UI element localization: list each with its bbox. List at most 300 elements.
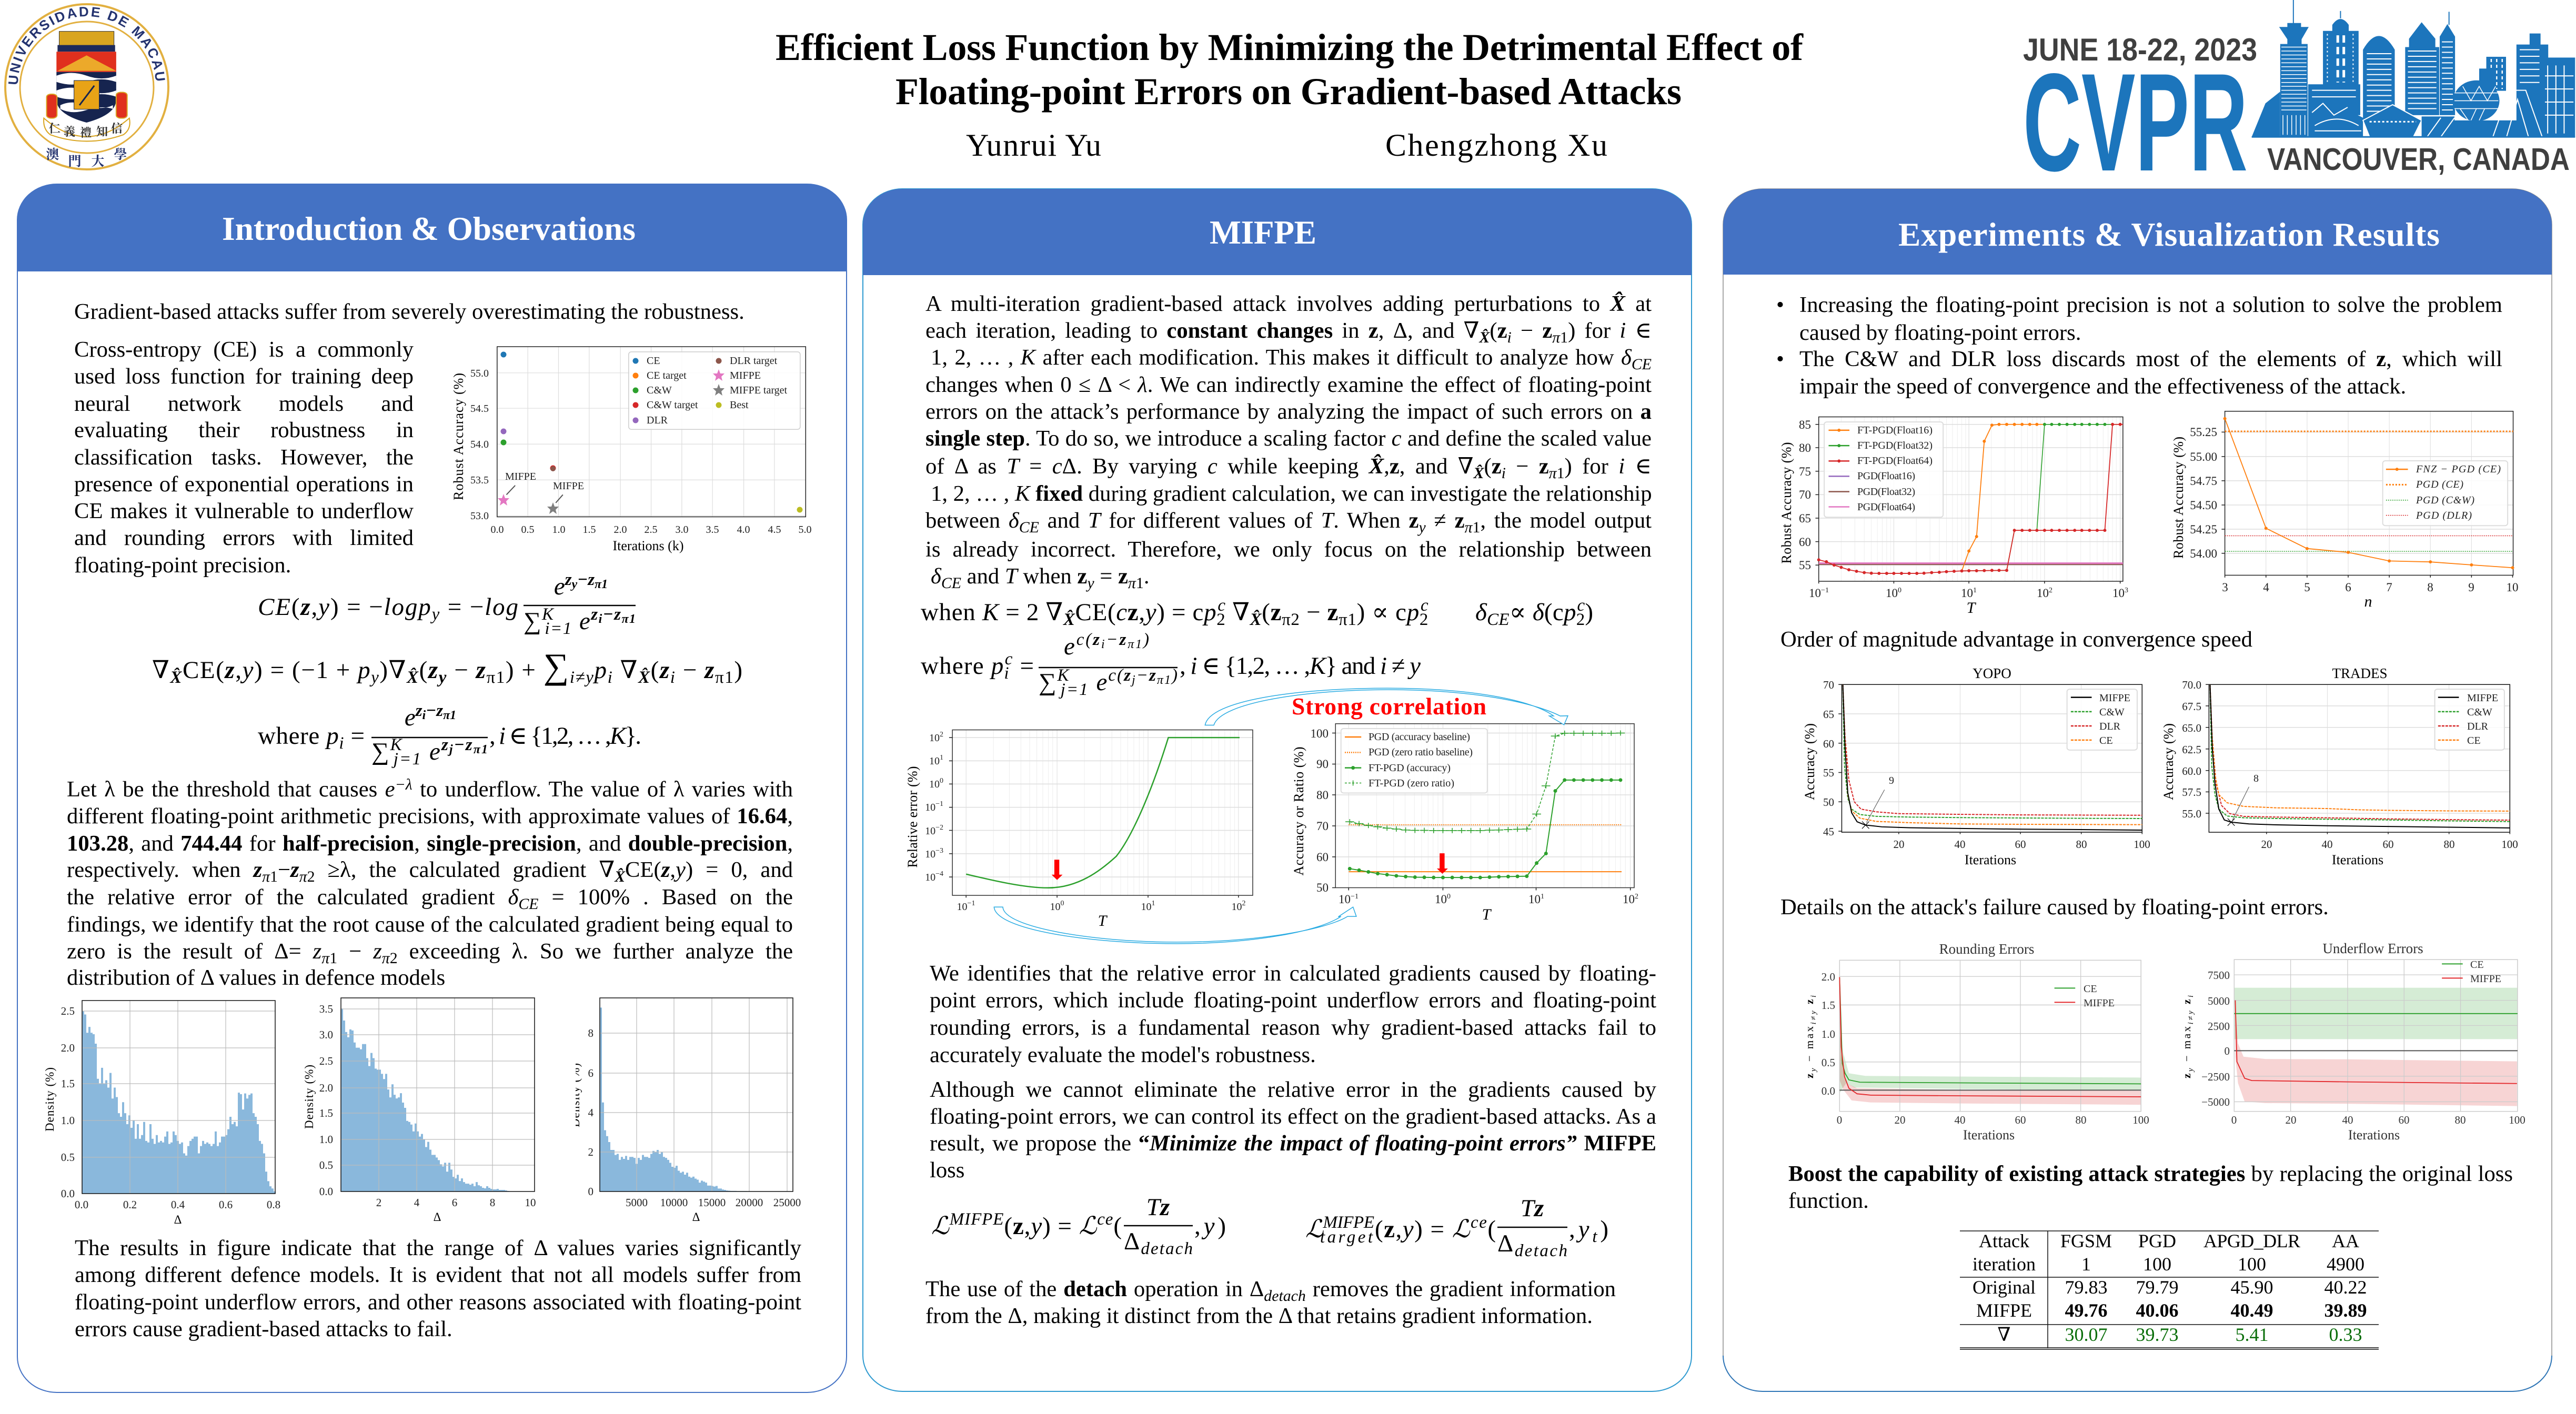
- text: bullet points: impair the speed of convergence and the effectiveness of the attack.: [1799, 374, 2406, 399]
- chart: accuracy or ratio vs T: Accuracy or Ratio (%): [1291, 747, 1306, 875]
- equation: targeted MIFPE loss: ,yt): [1569, 1216, 1608, 1246]
- text: cross-entropy paragraph: and rounding errors with limited: [74, 526, 414, 550]
- chart: histogram 1 of delta values: 0.0: [61, 1187, 75, 1200]
- chart: histogram 2 of delta values: Density (%): [303, 1065, 316, 1129]
- text: MIFPE proposal: floating-point errors, we can control its effect on the gradient-based attacks. As a: [930, 1104, 1656, 1129]
- equation: definition of p_i: , i ∈ {1,2, … ,K}.: [489, 722, 641, 750]
- chart: robust accuracy vs T by float precision: FT-PGD(Float16): [1857, 425, 1933, 436]
- chart: robust accuracy vs iterations scatter: CE: [647, 355, 660, 367]
- text: single step analysis paragraph: single step. To do so, we introduce a scaling factor c and define the scaled value: [925, 426, 1652, 451]
- chart: robust accuracy vs iterations scatter: 53.0: [470, 510, 489, 522]
- chart: robust accuracy vs n: FNZ − PGD (CE): [2416, 463, 2501, 475]
- text: lambda threshold paragraph: findings, we identify that the root cause of the calculated gradient being equal to: [67, 912, 793, 937]
- chart: relative error vs T: 10−1: [957, 900, 975, 913]
- chart: YOPO convergence: 50: [1823, 796, 1834, 809]
- chart: robust accuracy vs iterations scatter: CE target: [647, 370, 687, 381]
- chart: accuracy or ratio vs T: 80: [1316, 789, 1329, 802]
- equation: gradient of CE: ∇X̂CE(z,y) = (−1 + py)∇X̂(zy − zπ1) + ∑i≠ypi ∇X̂(zi − zπ1): [152, 646, 742, 687]
- text: cross-entropy paragraph: [74, 336, 414, 579]
- chart: TRADES convergence: 40: [2321, 838, 2333, 851]
- chart: accuracy or ratio vs T: FT-PGD (accuracy): [1368, 762, 1451, 774]
- chart: robust accuracy vs n: Robust Accuracy (%): [2171, 437, 2186, 559]
- icon: Vancouver skyline: [2252, 0, 2575, 137]
- chart: TRADES convergence: 60.0: [2182, 765, 2201, 777]
- table: attack results: 100: [2238, 1254, 2266, 1275]
- chart: robust accuracy vs iterations scatter: MIFPE: [730, 370, 761, 381]
- chart: robust accuracy vs iterations scatter: 1.5: [583, 524, 596, 536]
- chart: relative error vs T: Relative error (%): [905, 766, 920, 868]
- chart: robust accuracy vs iterations scatter: Robust Accuracy (%): [451, 373, 466, 500]
- chart: accuracy or ratio vs T: 100: [1435, 893, 1451, 906]
- chart: robust accuracy vs iterations scatter: 5.0: [799, 524, 811, 536]
- chart: histogram 1 of delta values: 0.2: [123, 1198, 137, 1211]
- chart: robust accuracy vs n: 3: [2222, 581, 2228, 594]
- logo: University of Macau crest: 學: [113, 147, 127, 162]
- chart: robust accuracy vs iterations scatter: Best: [730, 399, 749, 411]
- author: Yunrui Yu: Yunrui Yu: [966, 128, 1101, 163]
- chart: TRADES convergence: 65.0: [2182, 722, 2201, 734]
- chart: histogram 2 of delta values: 3.0: [319, 1028, 333, 1041]
- chart: histogram 2 of delta values: [303, 998, 536, 1224]
- chart: robust accuracy vs iterations scatter: 1.0: [552, 524, 565, 536]
- chart: robust accuracy vs iterations scatter: 55.0: [470, 368, 489, 379]
- table: attack results: 4900: [2327, 1254, 2364, 1275]
- chart: underflow errors: 80: [2455, 1114, 2466, 1126]
- text: cross-entropy paragraph: evaluating their robustness in: [74, 418, 414, 442]
- table: attack results: iteration: [1973, 1254, 2036, 1275]
- chart: underflow errors: Underflow Errors: [2322, 941, 2423, 956]
- table: attack results: Original: [1973, 1277, 2036, 1298]
- chart: rounding errors: 0.5: [1822, 1056, 1835, 1069]
- chart: robust accuracy vs n: 6: [2345, 581, 2351, 594]
- chart: robust accuracy vs n: PGD (C&W): [2416, 494, 2474, 506]
- chart: underflow errors: CE: [2470, 959, 2484, 971]
- equation: cross-entropy: CE(z,y) = −logpy = −log: [258, 593, 518, 624]
- chart: rounding errors: 40: [1954, 1114, 1966, 1126]
- chart: histogram 1 of delta values: 0.8: [267, 1198, 280, 1211]
- chart: robust accuracy vs T by float precision: 60: [1799, 536, 1811, 549]
- text: bullet points: [1776, 291, 2502, 400]
- text: relative error findings: [930, 960, 1656, 1069]
- chart: robust accuracy vs T by float precision: T: [1967, 599, 1977, 617]
- chart: histogram 3 of delta values: 2: [588, 1146, 593, 1158]
- equation: definition of p_i: [258, 701, 641, 769]
- chart: histogram 2 of delta values: Δ: [434, 1210, 441, 1224]
- chart: histogram 3 of delta values: 5000: [626, 1196, 648, 1209]
- equation: scaled p_i: ∑Kj=1 ec(zj−zπ1): [1039, 666, 1178, 699]
- text: bullet points: •: [1776, 347, 1784, 371]
- chart: histogram 3 of delta values: Δ: [692, 1210, 700, 1224]
- equation: definition of p_i: where pi =: [258, 722, 365, 753]
- chart: robust accuracy vs n: 54.75: [2190, 474, 2217, 488]
- chart: accuracy or ratio vs T: 10−1: [1339, 893, 1359, 906]
- chart: relative error vs T: 10−2: [925, 824, 943, 837]
- chart: robust accuracy vs n: n: [2364, 593, 2372, 610]
- chart: histogram 1 of delta values: Density (%): [43, 1067, 56, 1132]
- chart: YOPO convergence: CE: [2099, 735, 2113, 746]
- chart: relative error vs T: 100: [929, 777, 943, 790]
- chart: histogram 3 of delta values: 15000: [698, 1196, 726, 1209]
- text: detach operation note: [925, 1276, 1616, 1330]
- chart: histogram 3 of delta values: 6: [588, 1067, 593, 1079]
- chart: rounding errors: 0: [1837, 1114, 1842, 1126]
- chart: robust accuracy vs T by float precision: 100: [1886, 587, 1901, 600]
- equation: targeted MIFPE loss: (z,y) = ℒce(: [1375, 1213, 1496, 1243]
- logo: CVPR 2023 Vancouver: JUNE 18-22, 2023: [2023, 32, 2257, 67]
- chart: YOPO convergence: 60: [2015, 838, 2026, 851]
- chart: robust accuracy vs n: 4: [2263, 581, 2269, 594]
- chart: YOPO convergence: 100: [2134, 838, 2150, 851]
- equation: MIFPE loss: Tz: [1146, 1194, 1170, 1221]
- text: single step analysis paragraph: δCE and T when zy = zπ1.: [931, 564, 1149, 592]
- equation: gradient when K = 2: δCE∝ δ(cp2c): [1475, 596, 1593, 629]
- chart: rounding errors: 80: [2075, 1114, 2087, 1126]
- chart: YOPO convergence: 40: [1954, 838, 1966, 851]
- chart: histogram 2 of delta values: 0.5: [319, 1159, 333, 1171]
- chart: histogram 3 of delta values: 10000: [660, 1196, 688, 1209]
- chart: robust accuracy vs iterations scatter: C&W: [647, 385, 672, 396]
- chart: TRADES convergence: 80: [2443, 838, 2455, 851]
- text: lambda threshold paragraph: distribution of Δ values in defence models: [67, 965, 445, 990]
- chart: histogram 2 of delta values: 8: [490, 1196, 495, 1209]
- chart: rounding errors: MIFPE: [2084, 997, 2115, 1009]
- equation: MIFPE loss: ,y): [1194, 1213, 1226, 1240]
- chart: YOPO convergence: 9: [1889, 775, 1894, 786]
- chart: TRADES convergence: 70.0: [2182, 679, 2201, 691]
- table: attack results: Attack: [1979, 1230, 2029, 1251]
- table: attack results: FGSM: [2060, 1230, 2112, 1251]
- chart: accuracy or ratio vs T: [1291, 724, 1638, 923]
- chart: robust accuracy vs n: 10: [2507, 581, 2518, 594]
- text: failure details heading: Details on the attack's failure caused by floating-point errors.: [1780, 895, 2329, 920]
- chart: TRADES convergence: [2161, 665, 2518, 867]
- arrow: bottom curved arrow between charts: [994, 907, 1356, 944]
- text: cross-entropy paragraph: CE makes it vulnerable to underflow: [74, 499, 414, 523]
- text: single step analysis paragraph: A multi-iteration gradient-based attack involves adding perturbations to X̂ at: [925, 291, 1652, 316]
- equation: scaled p_i: ec(zi−zπ1): [1064, 630, 1149, 660]
- chart: relative error vs T: 100: [1050, 900, 1064, 913]
- chart: TRADES convergence: CE: [2467, 735, 2481, 746]
- title: Floating-point Errors on Gradient-based Attacks: [895, 70, 1682, 113]
- chart: robust accuracy vs iterations scatter: 54.5: [470, 403, 489, 415]
- chart: relative error vs T: 10−1: [925, 800, 943, 813]
- equation: MIFPE loss: Δdetach: [1124, 1228, 1193, 1258]
- chart: TRADES convergence: Accuracy (%): [2161, 723, 2176, 800]
- text: single step analysis paragraph: [925, 290, 1652, 590]
- chart: histogram 3 of delta values: [563, 998, 801, 1224]
- chart: robust accuracy vs n: 9: [2468, 581, 2474, 594]
- chart: histogram 1 of delta values: Δ: [174, 1213, 182, 1226]
- chart: TRADES convergence: MIFPE: [2467, 692, 2498, 704]
- chart: TRADES convergence: 20: [2261, 838, 2272, 851]
- text: detach operation note: from the Δ, making it distinct from the Δ that retains gradient information.: [925, 1304, 1593, 1328]
- panel background: [863, 189, 1692, 1391]
- chart: underflow errors: −2500: [2201, 1070, 2230, 1083]
- chart: robust accuracy vs iterations scatter: [451, 347, 811, 553]
- text: cross-entropy paragraph: neural network models and: [74, 391, 414, 416]
- text: MIFPE proposal: Although we cannot eliminate the relative error in the gradients caused by: [930, 1077, 1656, 1102]
- callout: strong correlation: Strong correlation: [1292, 693, 1486, 720]
- text: single step analysis paragraph: each iteration, leading to constant changes in z, Δ, and ∇X̂(zi − zπ1) for i ∈: [925, 318, 1652, 346]
- chart: robust accuracy vs iterations scatter: 2.5: [644, 524, 658, 536]
- logo: CVPR 2023 Vancouver: CVPR: [2023, 45, 2248, 200]
- chart: relative error vs T: 102: [929, 731, 943, 744]
- panel header: [1723, 189, 2552, 275]
- equation: targeted MIFPE loss: Tz: [1521, 1195, 1544, 1222]
- text: relative error findings: point errors, which include floating-point underflow errors and floating-point: [930, 988, 1656, 1013]
- chart: accuracy or ratio vs T: 102: [1623, 893, 1638, 906]
- chart: robust accuracy vs n: 7: [2386, 581, 2392, 594]
- text: relative error findings: We identifies that the relative error in calculated gradients caused by floating-: [930, 961, 1656, 986]
- chart: histogram 1 of delta values: 0.0: [75, 1198, 88, 1211]
- chart: accuracy or ratio vs T: 60: [1316, 851, 1329, 864]
- table: attack results: 40.06: [2136, 1300, 2178, 1321]
- chart: rounding errors: 100: [2132, 1114, 2149, 1126]
- chart: accuracy or ratio vs T: FT-PGD (zero ratio): [1368, 777, 1454, 789]
- table: attack results: 39.73: [2136, 1324, 2178, 1345]
- logo: University of Macau crest: 仁: [49, 122, 61, 135]
- chart: robust accuracy vs T by float precision: Robust Accuracy (%): [1779, 442, 1794, 564]
- table: attack results: 40.22: [2325, 1277, 2367, 1298]
- text: cross-entropy paragraph: classification tasks. However, the: [74, 445, 414, 470]
- equation: cross-entropy: ezy−zπ1: [554, 570, 608, 600]
- table: attack results: 0.33: [2329, 1324, 2362, 1345]
- table: attack results: 5.41: [2235, 1324, 2269, 1345]
- chart: robust accuracy vs T by float precision: PGD(Float16): [1857, 470, 1915, 482]
- chart: histogram 1 of delta values: 0.6: [219, 1198, 233, 1211]
- chart: TRADES convergence: 8: [2253, 773, 2259, 784]
- logo: University of Macau crest: 知: [96, 125, 108, 138]
- equation: gradient when K = 2: when K = 2 ∇X̂CE(cz,y) = cp2c ∇X̂(zπ2 − zπ1) ∝ cp2c: [921, 596, 1428, 629]
- author: Chengzhong Xu: Chengzhong Xu: [1385, 128, 1607, 163]
- chart: robust accuracy vs T by float precision: 103: [2112, 587, 2128, 600]
- chart: YOPO convergence: 60: [1823, 738, 1834, 750]
- text: cross-entropy paragraph: presence of exponential operations in: [74, 472, 414, 497]
- text: bullet points: caused by floating-point errors.: [1799, 320, 2081, 345]
- chart: accuracy or ratio vs T: 101: [1528, 893, 1544, 906]
- chart: histogram 3 of delta values: 20000: [736, 1196, 763, 1209]
- equation: cross-entropy: ∑Ki=1 ezi−zπ1: [524, 605, 636, 638]
- chart: histogram 3 of delta values: 0: [588, 1185, 593, 1198]
- chart: underflow errors: MIFPE: [2470, 973, 2501, 985]
- chart: robust accuracy vs T by float precision: 70: [1799, 488, 1811, 501]
- text: boost capability statement: [1788, 1160, 2513, 1215]
- chart: histogram 1 of delta values: 2.0: [61, 1042, 75, 1054]
- table: attack results: 30.07: [2065, 1324, 2108, 1345]
- chart: robust accuracy vs T by float precision: FT-PGD(Float32): [1857, 440, 1933, 451]
- text: MIFPE proposal: loss: [930, 1158, 964, 1183]
- table: attack results: APGD_DLR: [2203, 1230, 2300, 1251]
- chart: robust accuracy vs n: 55.25: [2190, 426, 2217, 439]
- chart: robust accuracy vs iterations scatter: DLR target: [730, 355, 778, 367]
- logo: University of Macau crest: 義: [64, 125, 75, 138]
- chart: robust accuracy vs iterations scatter: 4.0: [737, 524, 750, 536]
- chart: TRADES convergence: 55.0: [2182, 807, 2201, 820]
- chart: relative error vs T: 10−3: [925, 847, 943, 860]
- chart: relative error vs T: T: [1098, 912, 1108, 930]
- chart: rounding errors: zy − maxi≠y zi: [1803, 995, 1818, 1078]
- chart: robust accuracy vs T by float precision: 10−1: [1809, 587, 1829, 600]
- logo: CVPR 2023 Vancouver: [2023, 0, 2575, 200]
- chart: robust accuracy vs T by float precision: 75: [1799, 465, 1811, 478]
- chart: underflow errors: zy − maxi≠y zi: [2180, 995, 2195, 1078]
- chart: robust accuracy vs T by float precision: 55: [1799, 559, 1811, 572]
- chart: robust accuracy vs iterations scatter: MIFPE: [553, 480, 584, 492]
- chart: histogram 1 of delta values: 0.5: [61, 1151, 75, 1164]
- chart: underflow errors: [2180, 941, 2525, 1143]
- chart: underflow errors: 7500: [2208, 969, 2230, 982]
- text: histogram findings paragraph: [75, 1235, 801, 1343]
- chart: robust accuracy vs n: 55.00: [2190, 450, 2217, 463]
- text: single step analysis paragraph: is already incorrect. Therefore, we only focus on the relationship between: [925, 537, 1652, 562]
- arrow: top curved arrow between charts: [1205, 688, 1568, 725]
- chart: accuracy or ratio vs T: 100: [1310, 727, 1329, 740]
- table: attack results: 79.83: [2065, 1277, 2108, 1298]
- chart: rounding errors: CE: [2084, 983, 2097, 995]
- chart: YOPO convergence: 55: [1823, 766, 1834, 779]
- chart: robust accuracy vs iterations scatter: 3.0: [676, 524, 688, 536]
- chart: accuracy or ratio vs T: 50: [1316, 881, 1329, 894]
- heading: MIFPE: [1210, 214, 1316, 251]
- chart: robust accuracy vs iterations scatter: MIFPE: [505, 471, 536, 482]
- chart: robust accuracy vs T by float precision: [1779, 417, 2128, 617]
- equation: scaled p_i: , i ∈ {1,2, … ,K} and i ≠ y: [1180, 652, 1421, 680]
- chart: robust accuracy vs n: 54.50: [2190, 499, 2217, 512]
- text: single step analysis paragraph: between δCE and T for different values of T. When zy ≠ zπ1, the model output: [925, 508, 1652, 536]
- equation: definition of p_i: ezi−zπ1: [405, 701, 456, 731]
- chart: robust accuracy vs iterations scatter: 0.5: [521, 524, 535, 536]
- equation: definition of p_i: ∑Kj=1 ezj−zπ1: [371, 735, 488, 769]
- logo: University of Macau crest: 大: [91, 154, 105, 169]
- chart: YOPO convergence: Iterations: [1965, 852, 2016, 867]
- chart: histogram 1 of delta values: 1.5: [61, 1077, 75, 1090]
- chart: rounding errors: 1.5: [1822, 999, 1835, 1012]
- chart: accuracy or ratio vs T: 70: [1316, 820, 1329, 833]
- equation: cross-entropy: [258, 570, 636, 638]
- chart: histogram 3 of delta values: 4: [588, 1106, 593, 1119]
- equation: scaled p_i: [921, 630, 1421, 699]
- text: cross-entropy paragraph: Cross-entropy (CE) is a commonly: [74, 337, 414, 362]
- equation: MIFPE loss: [931, 1194, 1226, 1258]
- equation: targeted MIFPE loss: [1305, 1195, 1608, 1260]
- chart: YOPO convergence: 65: [1823, 708, 1834, 721]
- chart: robust accuracy vs iterations scatter: C&W target: [647, 399, 698, 411]
- chart: YOPO convergence: DLR: [2099, 721, 2121, 732]
- chart: histogram 2 of delta values: 2.5: [319, 1055, 333, 1067]
- chart: robust accuracy vs iterations scatter: Iterations (k): [612, 538, 684, 553]
- chart: histogram 2 of delta values: 2: [376, 1196, 381, 1209]
- text: single step analysis paragraph: 1, 2, … , K fixed during gradient calculation, we can investigate the relationship: [931, 481, 1652, 506]
- text: bullet points: •: [1776, 292, 1784, 317]
- text: histogram findings paragraph: floating-point underflow errors, and other reasons associated with floating-point: [75, 1290, 801, 1315]
- chart: robust accuracy vs T by float precision: 102: [2037, 587, 2052, 600]
- chart: rounding errors: 0.0: [1822, 1085, 1835, 1097]
- table: attack results: 1: [2081, 1254, 2091, 1275]
- table: attack results: ∇: [1997, 1324, 2011, 1346]
- chart: robust accuracy vs iterations scatter: 4.5: [768, 524, 781, 536]
- chart: histogram 2 of delta values: 3.5: [319, 1003, 333, 1015]
- panel background: [17, 184, 847, 1392]
- chart: histogram 2 of delta values: 6: [452, 1196, 457, 1209]
- chart: rounding errors: 60: [2015, 1114, 2026, 1126]
- chart: robust accuracy vs n: 5: [2304, 581, 2310, 594]
- chart: rounding errors: Rounding Errors: [1939, 941, 2034, 957]
- chart: rounding errors: 20: [1894, 1114, 1906, 1126]
- equation: scaled p_i: where pic =: [921, 650, 1034, 683]
- chart: histogram 2 of delta values: 4: [414, 1196, 420, 1209]
- table: attack results: 39.89: [2325, 1300, 2367, 1321]
- heading: Experiments & Visualization Results: [1898, 216, 2440, 253]
- title: [776, 26, 1804, 113]
- chart: rounding errors: Iterations: [1963, 1127, 2015, 1143]
- table: attack results: AA: [2332, 1230, 2359, 1251]
- chart: rounding errors: 2.0: [1822, 971, 1835, 983]
- text: bullet points: Increasing the floating-point precision is not a solution to solve the problem: [1799, 292, 2502, 317]
- text: boost capability statement: function.: [1788, 1188, 1869, 1213]
- table: attack results: [1960, 1230, 2379, 1349]
- chart: robust accuracy vs T by float precision: FT-PGD(Float64): [1857, 455, 1933, 467]
- chart: robust accuracy vs iterations scatter: 54.0: [470, 439, 489, 450]
- text: boost capability statement: Boost the capability of existing attack strategies by replacing the original loss: [1788, 1162, 2513, 1186]
- chart: histogram 1 of delta values: 2.5: [61, 1005, 75, 1017]
- chart: histogram 3 of delta values: 25000: [773, 1196, 801, 1209]
- chart: underflow errors: 0: [2225, 1045, 2230, 1057]
- text: lambda threshold paragraph: the relative error of the calculated gradient δCE = 100% . Based on the: [67, 885, 793, 913]
- chart: YOPO convergence: 70: [1823, 679, 1834, 691]
- logo: University of Macau crest: [4, 3, 169, 170]
- chart: underflow errors: 20: [2286, 1114, 2296, 1126]
- chart: YOPO convergence: 80: [2076, 838, 2087, 851]
- chart: histogram 3 of delta values: Density (%): [569, 1063, 582, 1127]
- chart: robust accuracy vs n: PGD (CE): [2416, 479, 2463, 490]
- text: lambda threshold paragraph: different floating-point arithmetic precisions, with approximate values of 16.64,: [67, 804, 793, 829]
- text: histogram findings paragraph: errors cause gradient-based attacks to fail.: [75, 1317, 452, 1341]
- equation: targeted MIFPE loss: Δdetach: [1497, 1230, 1567, 1260]
- chart: underflow errors: 2500: [2208, 1020, 2230, 1033]
- chart: robust accuracy vs iterations scatter: 0.0: [490, 524, 504, 536]
- chart: YOPO convergence: Accuracy (%): [1802, 723, 1817, 800]
- equation: MIFPE loss: ℒMIFPE(z,y) = ℒce(: [931, 1210, 1122, 1240]
- text: lambda threshold paragraph: respectively. when zπ1−zπ2 ≥λ, the calculated gradient ∇X̂CE(z,y) = 0, and: [67, 857, 793, 885]
- chart: underflow errors: 60: [2398, 1114, 2410, 1126]
- logo: University of Macau crest: 門: [68, 154, 82, 169]
- chart: YOPO convergence: YOPO: [1973, 665, 2011, 681]
- text: relative error findings: rounding errors, is a fundamental reason why gradient-based attacks fail to: [930, 1015, 1656, 1040]
- chart: relative error vs T: 10−4: [925, 870, 943, 883]
- chart: robust accuracy vs T by float precision: PGD(Float64): [1857, 501, 1915, 513]
- table: attack results: 49.76: [2065, 1300, 2108, 1321]
- chart: robust accuracy vs iterations scatter: DLR: [647, 415, 668, 426]
- chart: TRADES convergence: 57.5: [2182, 786, 2201, 799]
- text: detach operation note: The use of the detach operation in Δdetach removes the gradient information: [925, 1277, 1616, 1305]
- panel header: [17, 184, 847, 271]
- chart: robust accuracy vs n: PGD (DLR): [2416, 510, 2472, 521]
- chart: robust accuracy vs n: [2171, 411, 2518, 610]
- chart: relative error vs T: 101: [929, 754, 943, 767]
- chart: TRADES convergence: 100: [2501, 838, 2518, 851]
- panel header: [863, 189, 1692, 275]
- heading: Introduction & Observations: [222, 210, 636, 247]
- chart: underflow errors: 100: [2509, 1114, 2525, 1126]
- chart: YOPO convergence: MIFPE: [2099, 692, 2130, 704]
- chart: underflow errors: 0: [2231, 1114, 2237, 1126]
- text: histogram findings paragraph: among different defence models. It is evident that not all models suffer from: [75, 1262, 801, 1287]
- text: lambda threshold paragraph: zero is the result of Δ= zπ1 − zπ2 exceeding λ. So we further analyze the: [67, 939, 793, 967]
- chart: histogram 2 of delta values: 1.0: [319, 1133, 333, 1146]
- text: single step analysis paragraph: changes when 0 ≤ Δ < λ. We can indirectly examine the effect of floating-point: [925, 372, 1652, 397]
- title: Efficient Loss Function by Minimizing the Detrimental Effect of: [776, 26, 1804, 68]
- chart: YOPO convergence: 20: [1893, 838, 1905, 851]
